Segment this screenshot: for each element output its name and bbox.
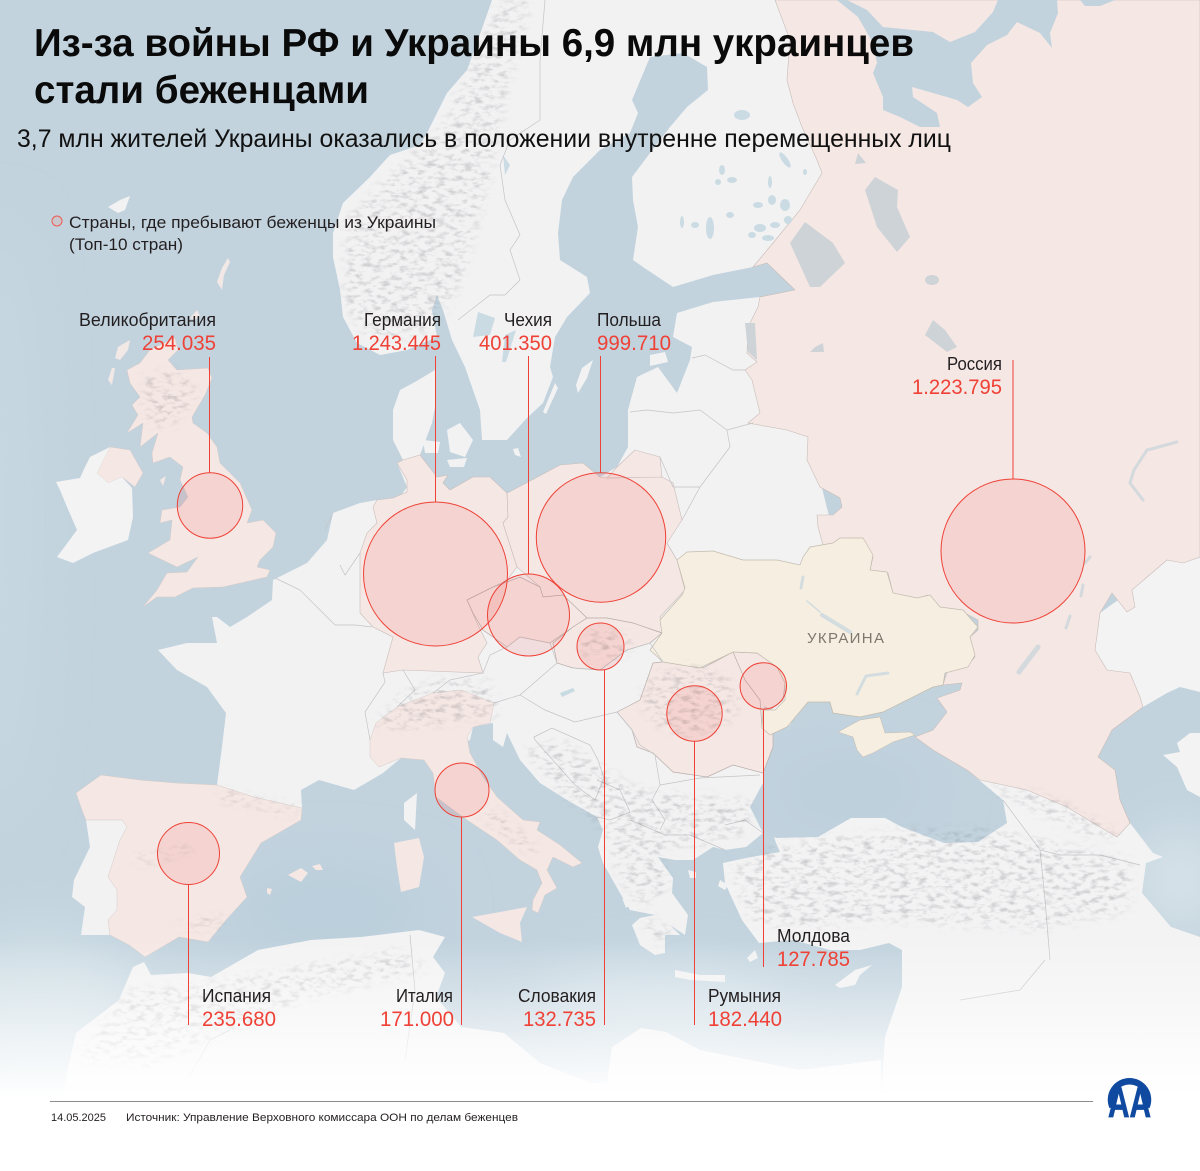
lakes of Finland and Sweden — [473, 110, 807, 362]
marker: Spain: 235.680 — [202, 1008, 276, 1031]
marker: Romania — [667, 686, 782, 1031]
White Sea — [837, 0, 1058, 127]
marker: Italy: 171.000 — [380, 1008, 454, 1031]
island: Sicily — [472, 907, 527, 942]
bottom fade — [0, 940, 1200, 1100]
country: Ukraine — [650, 538, 978, 735]
land: continental Europe — [158, 297, 850, 955]
country: Russia — [745, 0, 1200, 837]
islands: Baltic, Danish, Greek, Crete, Cyprus — [423, 352, 872, 988]
marker: Romania: 182.440 — [708, 1008, 782, 1031]
marker: Slovakia — [518, 623, 624, 1031]
islands: Balearic — [267, 864, 323, 895]
rivers of Ukraine — [801, 577, 888, 694]
marker: Great Britain — [79, 310, 243, 538]
marker: Moldova: 127.785 — [777, 948, 850, 971]
marker: Spain: Испания — [202, 986, 271, 1006]
marker: Poland: 999.710 — [597, 332, 671, 355]
islands: Hebrides, Orkney, Shetland, Faroe — [108, 196, 230, 486]
land: Kazakhstan — [1095, 557, 1200, 707]
country: Spain — [76, 775, 302, 957]
country: Northern Ireland — [97, 447, 143, 487]
marker: Czechia: Чехия — [504, 310, 552, 330]
footer rule — [50, 1100, 1093, 1102]
lakes of Russia — [745, 153, 957, 360]
marker: Romania: Румыния — [708, 986, 781, 1006]
country: Slovakia — [553, 618, 662, 670]
country: Romania and Moldova — [617, 652, 785, 777]
title: Из-за войны РФ и Украины 6,9 млн украинцев — [34, 22, 914, 65]
marker: Poland: Польша — [597, 310, 662, 330]
land: Scandinavia and Finland — [333, 0, 822, 440]
marker: Germany — [352, 310, 508, 646]
country: Germany — [360, 455, 517, 673]
title — [34, 22, 914, 112]
marker: Great Britain: Великобритания — [79, 310, 216, 330]
subtitle: 3,7 млн жителей Украины оказались в положении внутренне перемещенных лиц — [17, 125, 951, 153]
marker: Russia: Россия — [947, 354, 1002, 374]
marker: Czechia: 401.350 — [479, 332, 552, 355]
marker: Great Britain: 254.035 — [142, 332, 216, 355]
marker: Russia: 1.223.795 — [912, 376, 1002, 399]
marker: Germany: 1.243.445 — [352, 332, 441, 355]
country: Russia, Kaliningrad — [607, 450, 662, 478]
marker: Slovakia: 132.735 — [523, 1008, 596, 1031]
land: Iberia — [72, 820, 130, 935]
footer source: Источник: Управление Верховного комиссара ООН по делам беженцев — [126, 1112, 518, 1124]
marker: Moldova — [740, 663, 851, 971]
marker: Germany: Германия — [364, 310, 441, 330]
country borders — [190, 0, 1140, 1075]
icon: Anadolu Agency logo — [1108, 1079, 1151, 1127]
marker: Spain — [158, 822, 276, 1031]
marker: Russia — [912, 354, 1085, 623]
footer date: 14.05.2025 — [51, 1112, 106, 1124]
legend: (Топ-10 стран) — [69, 235, 183, 254]
land: North Africa — [50, 930, 881, 1110]
marker: Slovakia: Словакия — [518, 986, 596, 1006]
country: Ukraine, Crimea — [838, 717, 915, 757]
label: Ukraine: УКРАИНА — [807, 630, 884, 647]
island: Corsica — [404, 793, 417, 830]
marker: Poland — [536, 310, 671, 602]
legend: Страны, где пребывают беженцы из Украины — [69, 213, 436, 232]
marker: Czechia — [479, 310, 570, 656]
icon: Anadolu Agency logo: AA — [1108, 1079, 1151, 1127]
marker: Moldova: Молдова — [777, 926, 851, 946]
legend — [52, 213, 436, 254]
country: Italy — [370, 690, 582, 913]
country: Ireland — [56, 447, 133, 563]
marker: Italy — [380, 763, 489, 1031]
island: Sardinia — [394, 838, 424, 892]
country: Czechia — [467, 577, 587, 647]
marker: Italy: Италия — [396, 986, 453, 1006]
land: Turkey, Caucasus and Middle East — [723, 770, 1200, 1100]
rivers and reservoirs of southern Russia — [1019, 442, 1177, 672]
Balaton lake — [560, 688, 575, 697]
title: стали беженцами — [34, 69, 369, 112]
country: Poland — [503, 463, 685, 633]
country: Great Britain — [127, 338, 276, 607]
